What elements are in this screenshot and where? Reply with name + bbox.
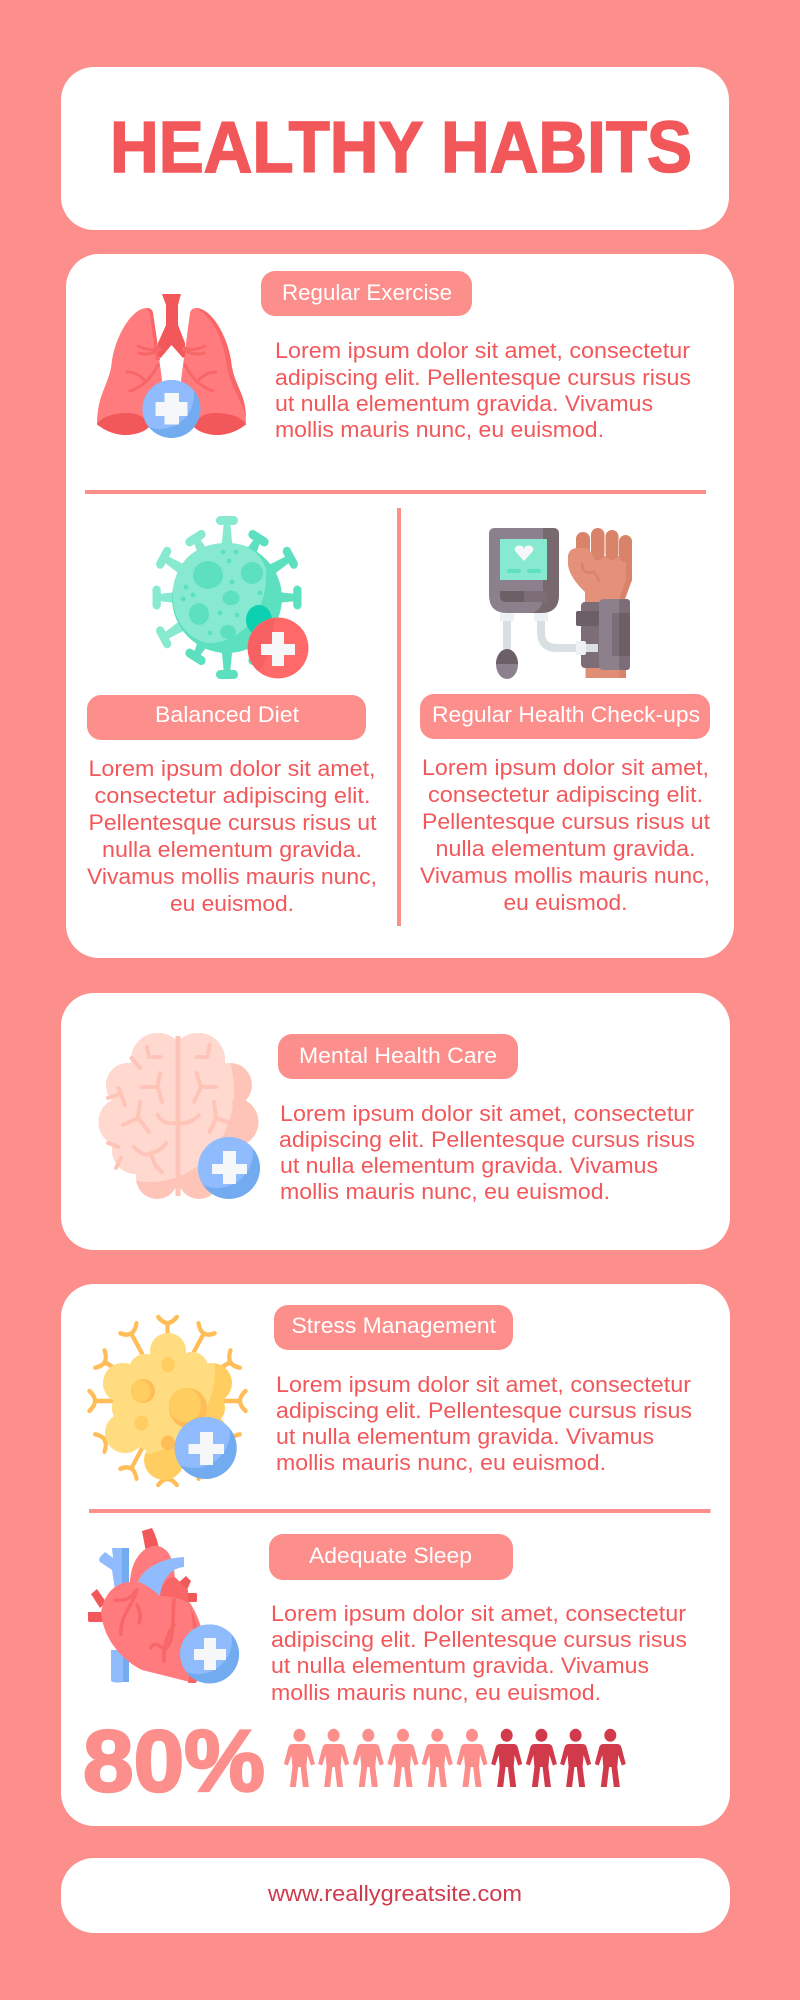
header panel [61,67,729,230]
heading: Regular Exercise: Regular Exercise [282,280,452,305]
panel: stress management and adequate sleep [61,1284,730,1826]
heading: Stress Management [274,1305,513,1350]
text: stress description: Lorem ipsum dolor sit amet, consectetur [276,1372,692,1397]
footer panel [61,1858,730,1933]
icon: brain [98,1033,260,1199]
heading: Stress Management: Stress Management [292,1313,497,1338]
text: mental health description: Lorem ipsum dolor sit amet, consectetur [280,1101,695,1126]
text: diet description: consectetur adipiscing elit. [94,783,370,808]
text: exercise description: mollis mauris nunc, eu euismod. [275,417,604,442]
text: exercise description: ut nulla elementum gravida. Vivamus [275,391,653,416]
text: sleep description: adipiscing elit. Pellentesque cursus risus [271,1627,687,1652]
icon: blood pressure monitor [489,528,632,679]
text: diet description: Lorem ipsum dolor sit amet, [88,756,376,781]
text: check-ups description: nulla elementum gravida. [436,836,696,861]
text: mental health description: mollis mauris nunc, eu euismod. [280,1179,610,1204]
text: stress description: mollis mauris nunc, eu euismod. [276,1450,606,1475]
text: diet description: nulla elementum gravida. [102,837,362,862]
text: stress description: adipiscing elit. Pellentesque cursus risus [276,1398,692,1423]
heading: Regular Health Check-ups: Regular Health Check-ups [432,702,700,727]
text: mental health description [279,1101,695,1204]
icon: virus [152,516,308,679]
panel: mental health care [61,993,730,1250]
heading: Balanced Diet: Balanced Diet [155,702,300,727]
heading: Adequate Sleep [269,1534,513,1580]
heading: Adequate Sleep: Adequate Sleep [309,1543,472,1568]
website url: www.reallygreatsite.com [267,1881,522,1906]
text: exercise description: adipiscing elit. Pellentesque cursus risus [275,365,691,390]
pictogram: 10 people, 80 percent [284,1729,626,1787]
text: diet description: Pellentesque cursus risus ut [88,810,377,835]
text: sleep description: ut nulla elementum gravida. Vivamus [271,1653,649,1678]
icon: heart [88,1528,239,1684]
heading: Balanced Diet [87,695,366,740]
icon: lungs [97,294,246,438]
text: sleep description: mollis mauris nunc, eu euismod. [271,1680,601,1705]
text: mental health description: ut nulla elementum gravida. Vivamus [280,1153,658,1178]
text: check-ups description: Pellentesque cursus risus ut [422,809,711,834]
infographic canvas [61,67,734,1933]
text: check-ups description: eu euismod. [504,890,628,915]
icon: medical badge [142,380,200,438]
title: HEALTHY HABITS [110,108,692,188]
icon: medical badge [180,1624,240,1684]
panel: exercise, diet and check-ups [66,254,734,958]
heading: Regular Exercise [261,271,472,316]
text: diet description: eu euismod. [170,891,294,916]
icon: red medical badge [248,618,308,678]
text: stress description [276,1372,692,1475]
text: check-ups description: Vivamus mollis mauris nunc, [420,863,710,888]
text: check-ups description: consectetur adipiscing elit. [428,782,703,807]
text: stress description: ut nulla elementum gravida. Vivamus [276,1424,654,1449]
text: mental health description: adipiscing elit. Pellentesque cursus risus [279,1127,695,1152]
heading: Mental Health Care: Mental Health Care [299,1043,497,1068]
icon: medical badge [198,1137,260,1199]
text: diet description: Vivamus mollis mauris nunc, [87,864,377,889]
stat: 80%: 80% [83,1713,265,1810]
text: check-ups description: Lorem ipsum dolor sit amet, [422,755,709,780]
heading: Regular Health Check-ups [420,694,710,739]
text: sleep description [271,1601,687,1705]
heading: Mental Health Care [278,1034,518,1079]
text: exercise description [275,338,691,442]
hand [568,528,632,602]
icon: medical badge [174,1417,237,1479]
text: diet description [87,756,377,916]
text: exercise description: Lorem ipsum dolor sit amet, consectetur [275,338,691,363]
text: check-ups description [420,755,711,915]
icon: stress cell [89,1317,246,1485]
text: sleep description: Lorem ipsum dolor sit amet, consectetur [271,1601,687,1626]
